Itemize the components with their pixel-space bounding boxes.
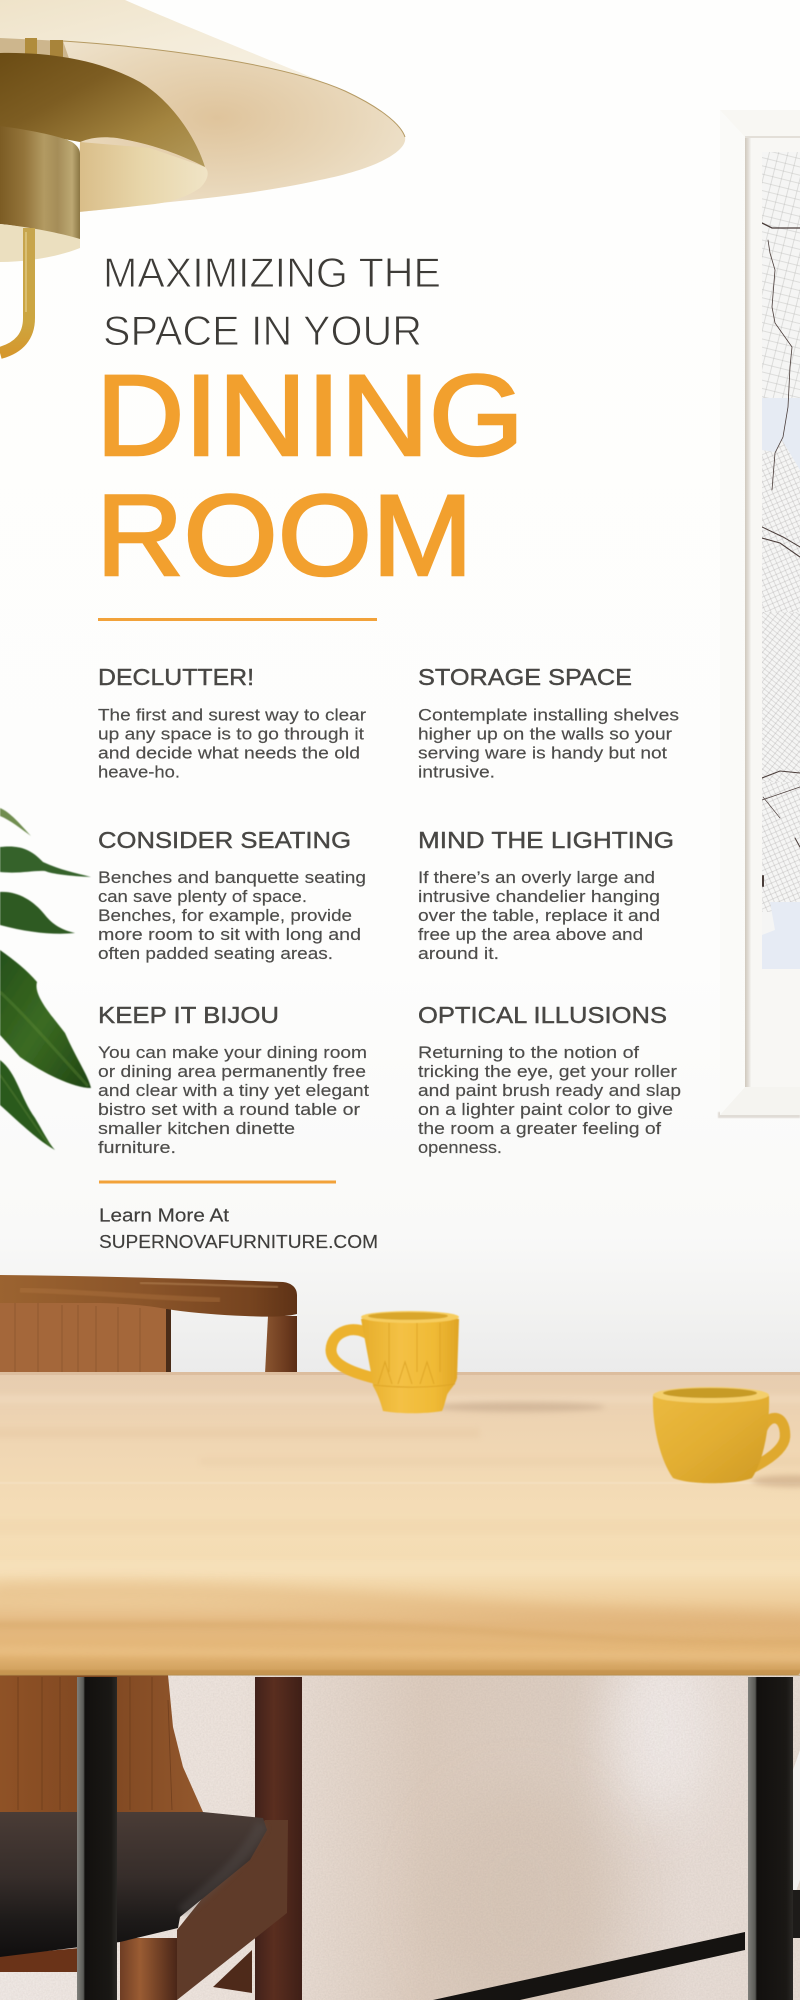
left lower rail (0, 1948, 80, 1972)
body text: free up the area above and (418, 925, 643, 944)
chair back upper (0, 1275, 297, 1374)
frame shadow (718, 1112, 800, 1118)
body text: smaller kitchen dinette (98, 1119, 295, 1138)
mid brass dome (0, 53, 205, 167)
body text: tricking the eye, get your roller (418, 1062, 677, 1081)
body text (98, 1043, 369, 1157)
heading: STORAGE SPACE (418, 664, 632, 690)
panel: storage space (418, 664, 679, 782)
rear post (255, 1677, 302, 2000)
title line 1: MAXIMIZING THE (103, 249, 441, 296)
seat frame side (177, 1820, 288, 2000)
learn more line: Learn More At (99, 1204, 229, 1226)
top rail (0, 1275, 297, 1317)
framed map (718, 110, 800, 1118)
black seat (0, 1812, 267, 1957)
body text: around it. (418, 944, 499, 963)
body text: intrusive chandelier hanging (418, 887, 660, 906)
brass band (0, 126, 80, 240)
body text (418, 706, 679, 782)
inner of mid dome (78, 142, 208, 212)
leaf 4 large (0, 950, 91, 1088)
shade underside (63, 41, 405, 212)
leaf 5 (0, 1060, 55, 1150)
body text: You can make your dining room (98, 1043, 367, 1062)
body text: Returning to the notion of (418, 1043, 639, 1062)
support rods (25, 38, 37, 58)
body text: heave-ho. (98, 762, 180, 782)
front edge grain (0, 1578, 656, 1616)
body text: bistro set with a round table or (98, 1100, 360, 1119)
body text: more room to sit with long and (98, 925, 361, 944)
icon: yellow mug left (331, 1311, 459, 1413)
handle (331, 1330, 374, 1378)
background: upper wall (0, 0, 800, 1373)
wood streaks (0, 1395, 800, 1403)
body text: Benches, for example, provide (98, 906, 352, 925)
chair lower (0, 1675, 302, 2000)
call to action (99, 1204, 378, 1252)
panel: mind the lighting (418, 827, 674, 963)
map artwork (762, 152, 800, 969)
body text: and clear with a tiny yet elegant (98, 1081, 369, 1100)
body (653, 1396, 769, 1483)
body text (98, 706, 366, 782)
body text: on a lighter paint color to give (418, 1100, 673, 1119)
website: SUPERNOVAFURNITURE.COM (99, 1231, 378, 1252)
body text: the room a greater feeling of (418, 1119, 661, 1138)
panel: declutter (98, 664, 366, 782)
background: lower wall (0, 1640, 800, 2000)
body text: or dining area permanently free (98, 1062, 366, 1081)
leaf 3 (0, 892, 75, 934)
body text (98, 868, 366, 963)
picture frame (720, 110, 800, 1115)
body text: and decide what needs the old (98, 744, 360, 762)
body text (418, 868, 660, 963)
water (762, 398, 800, 470)
right of leg wall glimpse (793, 1750, 800, 1900)
title word DINING: DINING (96, 352, 524, 480)
handle (748, 1418, 785, 1470)
heading: OPTICAL ILLUSIONS (418, 1002, 667, 1028)
heading: KEEP IT BIJOU (98, 1002, 279, 1028)
panel: optical illusions (418, 1002, 681, 1157)
lamp cap (0, 0, 118, 3)
ridges (374, 1323, 455, 1387)
panel: consider seating (98, 827, 366, 963)
body text: If there’s an overly large and (418, 868, 655, 887)
icon: yellow mug right (653, 1387, 785, 1483)
rear post (265, 1316, 297, 1374)
upper shade outer surface (0, 0, 345, 91)
back panel (0, 1300, 167, 1374)
band inner cream (0, 224, 80, 262)
heading: CONSIDER SEATING (98, 827, 351, 853)
icon: pendant lamp (0, 0, 405, 353)
body text: over the table, replace it and (418, 906, 660, 925)
body text: and paint brush ready and slap (418, 1081, 681, 1100)
panel: keep it bijou (98, 1002, 369, 1157)
table underside edge (0, 1674, 800, 1676)
dining table (0, 1372, 800, 1676)
metal table leg left (77, 1677, 117, 2000)
body text (418, 1043, 681, 1157)
crossbar (433, 1932, 745, 2000)
front leg (120, 1938, 177, 2000)
body text: higher up on the walls so your (418, 724, 672, 744)
plant leaves (0, 808, 91, 1150)
body text: can save plenty of space. (98, 887, 307, 906)
thin leaf (0, 808, 31, 836)
rim (653, 1387, 769, 1403)
shade rim line (63, 41, 405, 137)
back leg brace (213, 1950, 252, 1993)
cup shadows (435, 1402, 605, 1412)
brass handle (0, 228, 29, 353)
leaf 2 (0, 846, 91, 877)
body text: intrusive. (418, 762, 495, 782)
title line 2: SPACE IN YOUR (103, 307, 422, 354)
body (361, 1316, 459, 1413)
body text: furniture. (98, 1138, 176, 1157)
heading: MIND THE LIGHTING (418, 827, 674, 853)
body text: serving ware is handy but not (418, 744, 667, 762)
body text: up any space is to go through it (98, 724, 364, 744)
rim (361, 1311, 459, 1323)
shade backing (0, 36, 80, 66)
body text: Contemplate installing shelves (418, 706, 679, 724)
body text: Benches and banquette seating (98, 868, 366, 887)
back panel lower (0, 1675, 203, 1812)
title word ROOM: ROOM (96, 472, 473, 600)
body text: often padded seating areas. (98, 944, 333, 963)
leg (748, 1677, 793, 2000)
footer divider (99, 1180, 336, 1184)
roads (762, 223, 800, 886)
body text: openness. (418, 1138, 502, 1157)
title divider (98, 618, 377, 621)
title (96, 249, 524, 600)
heading: DECLUTTER! (98, 664, 254, 690)
metal table leg right and crossbar (433, 1677, 800, 2000)
body text: The first and surest way to clear (98, 706, 366, 724)
